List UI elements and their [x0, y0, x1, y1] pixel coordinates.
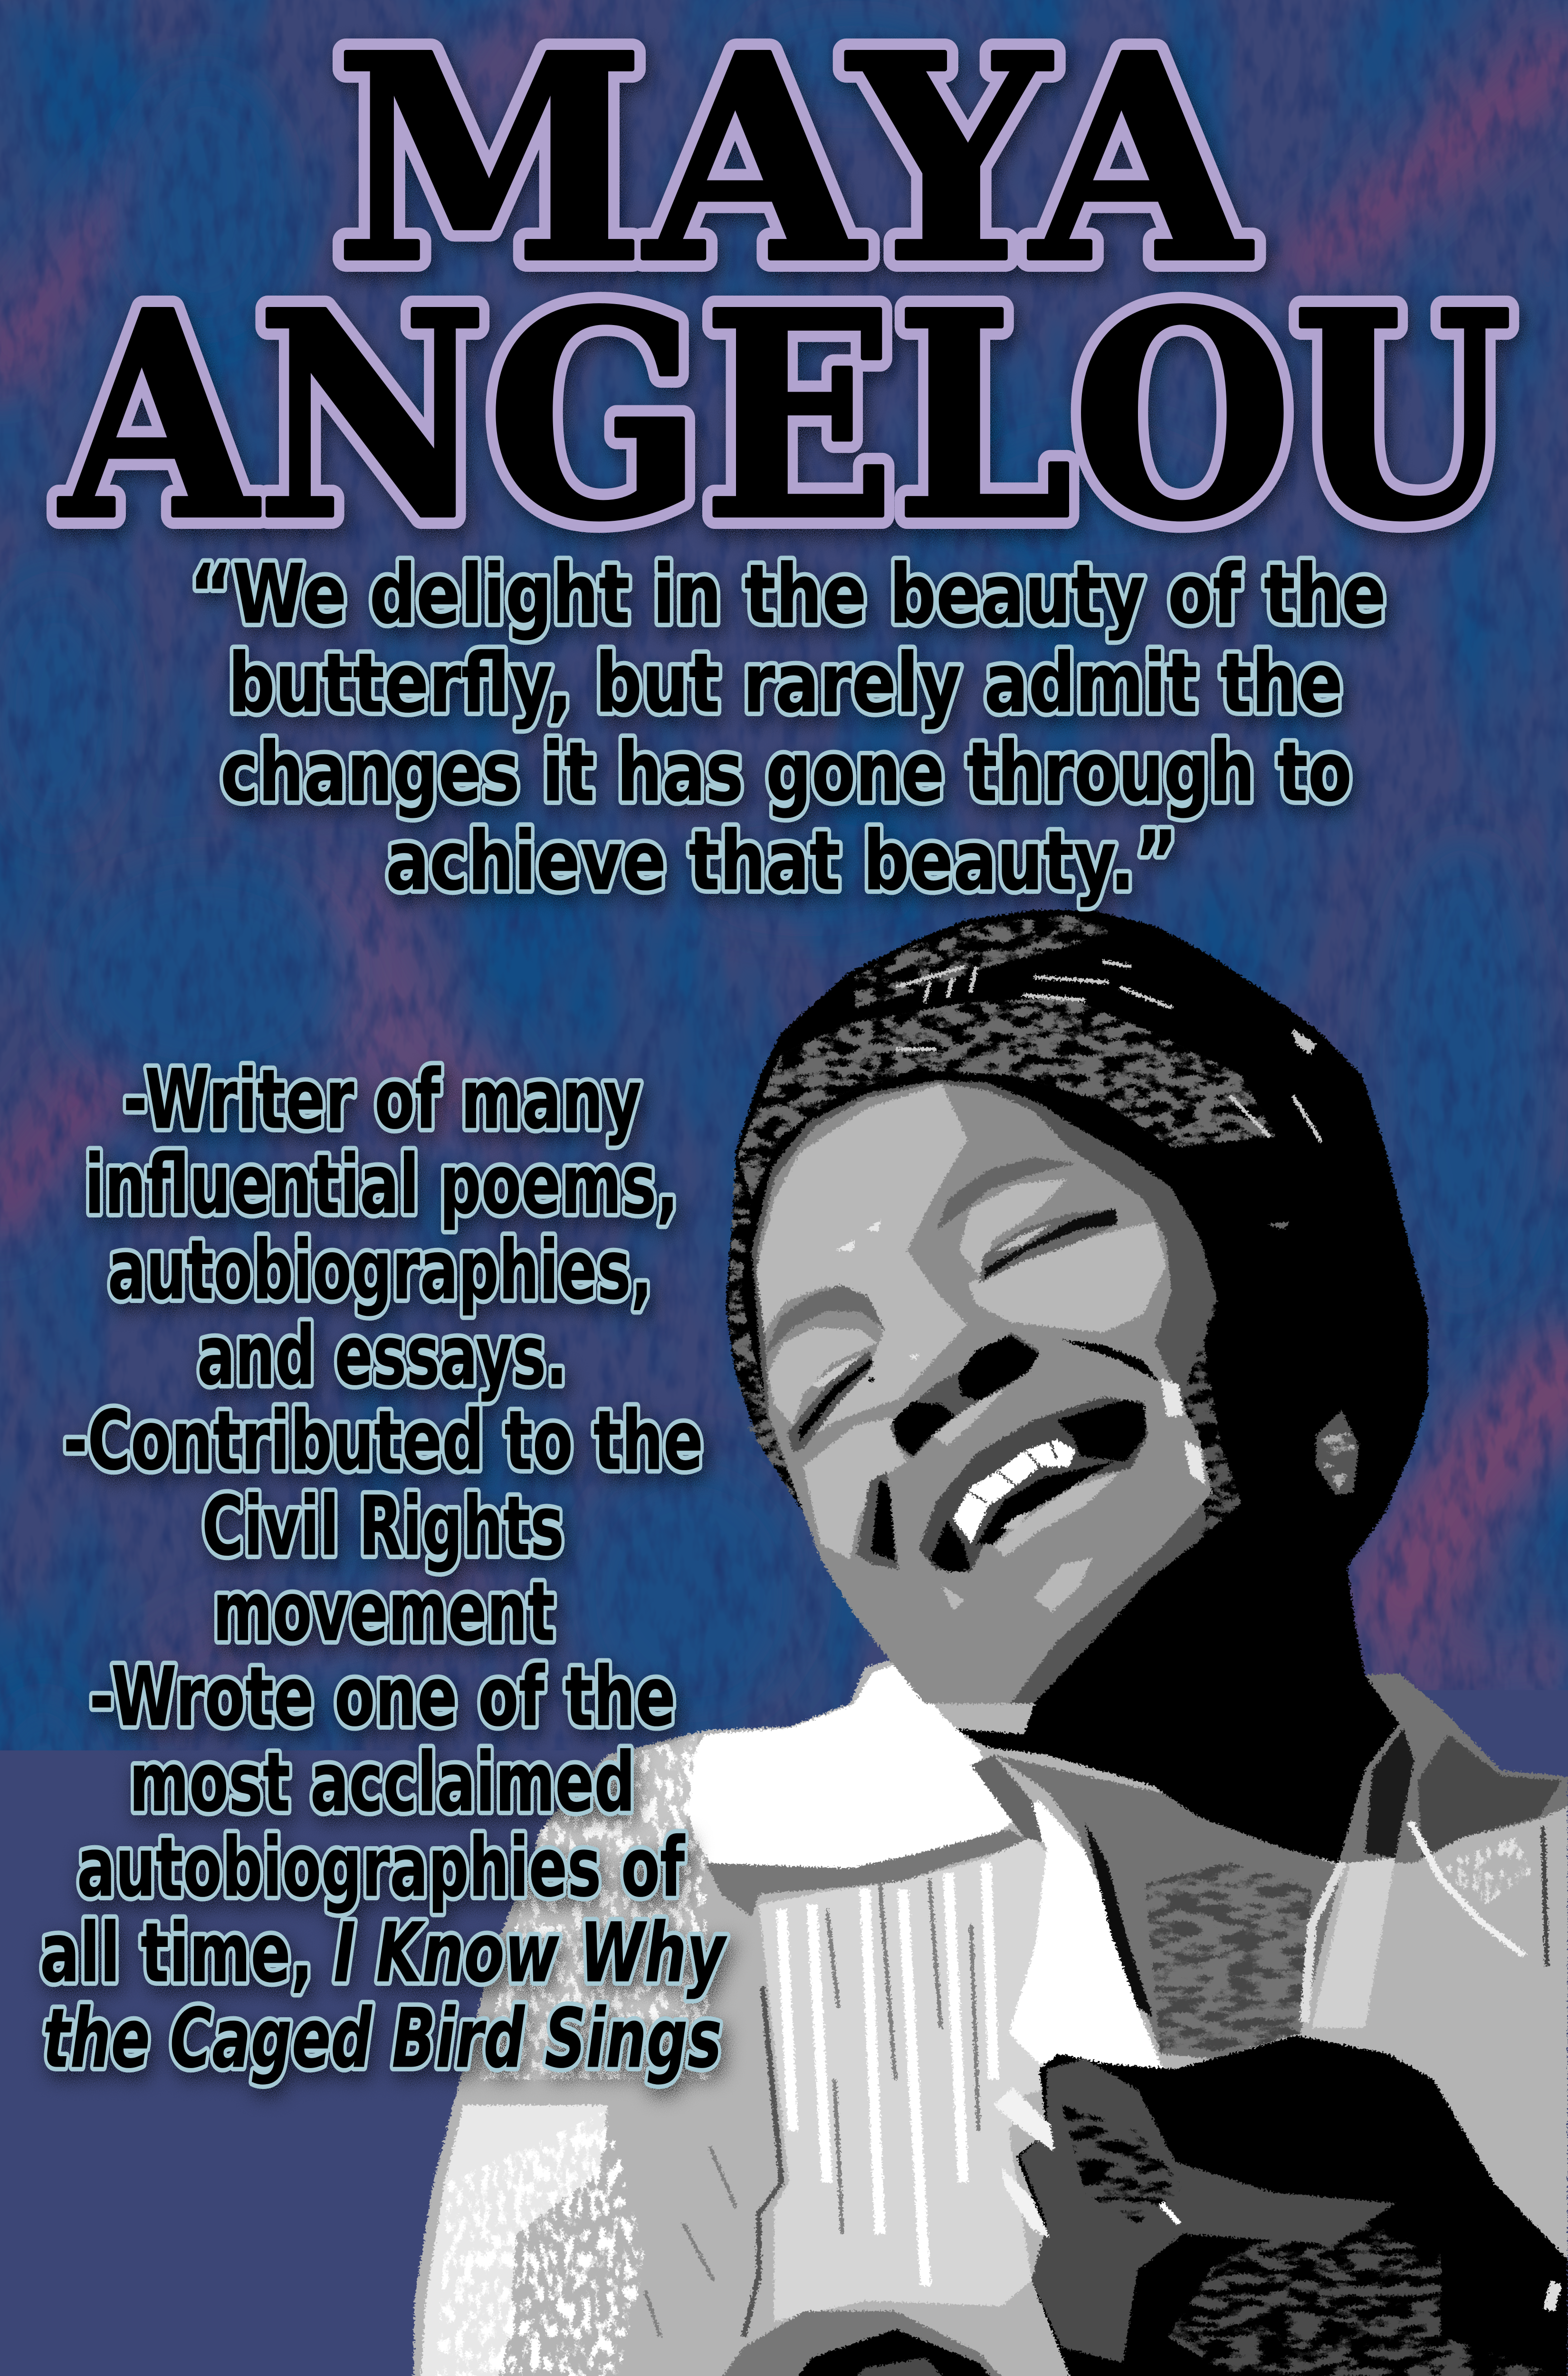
quote text block	[190, 546, 1386, 909]
biography text block: autobiographies of	[77, 1820, 686, 1915]
earring	[1316, 1410, 1359, 1495]
nose	[890, 1332, 1040, 1459]
biography text block: autobiographies of	[77, 1820, 686, 1915]
biography text block: influential poems,	[85, 1137, 679, 1232]
sleeve highlight	[418, 2105, 607, 2376]
sleeve seam	[744, 1987, 782, 2337]
biography text block: the Caged Bird Sings	[43, 1991, 722, 2086]
left eye and brow	[764, 1285, 885, 1356]
chest panel with vertical pleats	[759, 1837, 1153, 2321]
biography text block: -Writer of many	[123, 1052, 641, 1147]
title: MAYA: MAYA	[335, 0, 1255, 325]
neck	[956, 1616, 1399, 1863]
mouth	[918, 1397, 1147, 1572]
biography text block: -Contributed to the	[63, 1393, 703, 1488]
biography text block: movement	[213, 1564, 555, 1659]
biography text block: Civil Rights	[202, 1478, 564, 1574]
biography text block: all time, I Know Why	[40, 1905, 727, 2001]
biography text block: most acclaimed	[129, 1734, 635, 1830]
face highlights	[756, 1084, 1166, 1612]
biography text block: most acclaimed	[129, 1734, 635, 1830]
biography text block: the Caged Bird Sings	[43, 1991, 722, 2086]
centre chest skin	[994, 1755, 1342, 2059]
biography text block	[40, 1052, 727, 2086]
right collar	[1339, 1673, 1568, 1863]
teeth	[953, 1440, 1075, 1544]
head and face	[726, 910, 1428, 1704]
biography text block: -Writer of many	[123, 1052, 641, 1147]
quote text block: achieve that beauty.”	[386, 813, 1177, 909]
fingers	[994, 2087, 1054, 2152]
face mid tone	[752, 1080, 1241, 1704]
biography text block: movement	[213, 1564, 555, 1659]
pendant bottom-left dark collar gap	[687, 2311, 1047, 2376]
shirt and hands	[413, 1616, 1568, 2376]
right eye and brow	[937, 1157, 1075, 1229]
quote text block: achieve that beauty.”	[386, 813, 1177, 909]
biography text block: -Wrote one of the	[89, 1649, 676, 1744]
shoulder highlight	[679, 1662, 1013, 1873]
biography text block: Civil Rights	[202, 1478, 564, 1574]
hand	[1016, 2036, 1568, 2376]
biography text block: and essays.	[197, 1308, 567, 1403]
biography text block: and essays.	[197, 1308, 567, 1403]
biography text block: -Wrote one of the	[89, 1649, 676, 1744]
title: MAYA: MAYA	[335, 0, 1255, 325]
portrait photo of Maya Angelou, posterised grayscale	[413, 910, 1568, 2376]
smile crease	[856, 1472, 899, 1570]
biography text block: -Contributed to the	[63, 1393, 703, 1488]
head wrap texture	[737, 997, 1275, 1198]
biography text block: autobiographies,	[108, 1222, 652, 1318]
biography text block: influential poems,	[85, 1137, 679, 1232]
biography text block: autobiographies,	[108, 1222, 652, 1318]
biography text block: all time, I Know Why	[40, 1905, 727, 2001]
cheek crease	[1061, 1339, 1158, 1381]
